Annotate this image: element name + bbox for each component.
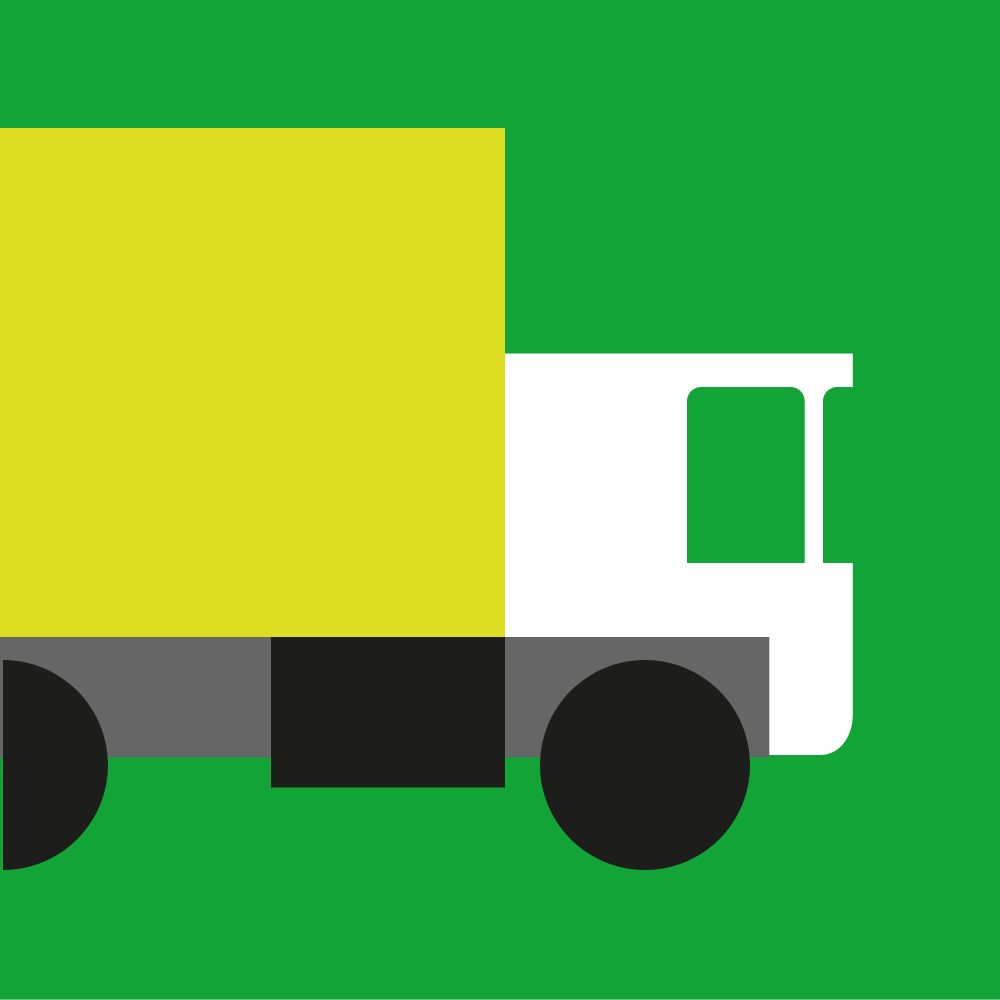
- rear wheel: [3, 660, 108, 870]
- front wheel: [540, 660, 750, 870]
- truck cab: [505, 354, 853, 755]
- side step block: [271, 637, 505, 788]
- bottom edge highlight: [0, 999, 1000, 1000]
- truck: [0, 128, 853, 870]
- chassis: [0, 637, 769, 757]
- cargo box: [0, 128, 505, 637]
- cab window: [687, 387, 805, 563]
